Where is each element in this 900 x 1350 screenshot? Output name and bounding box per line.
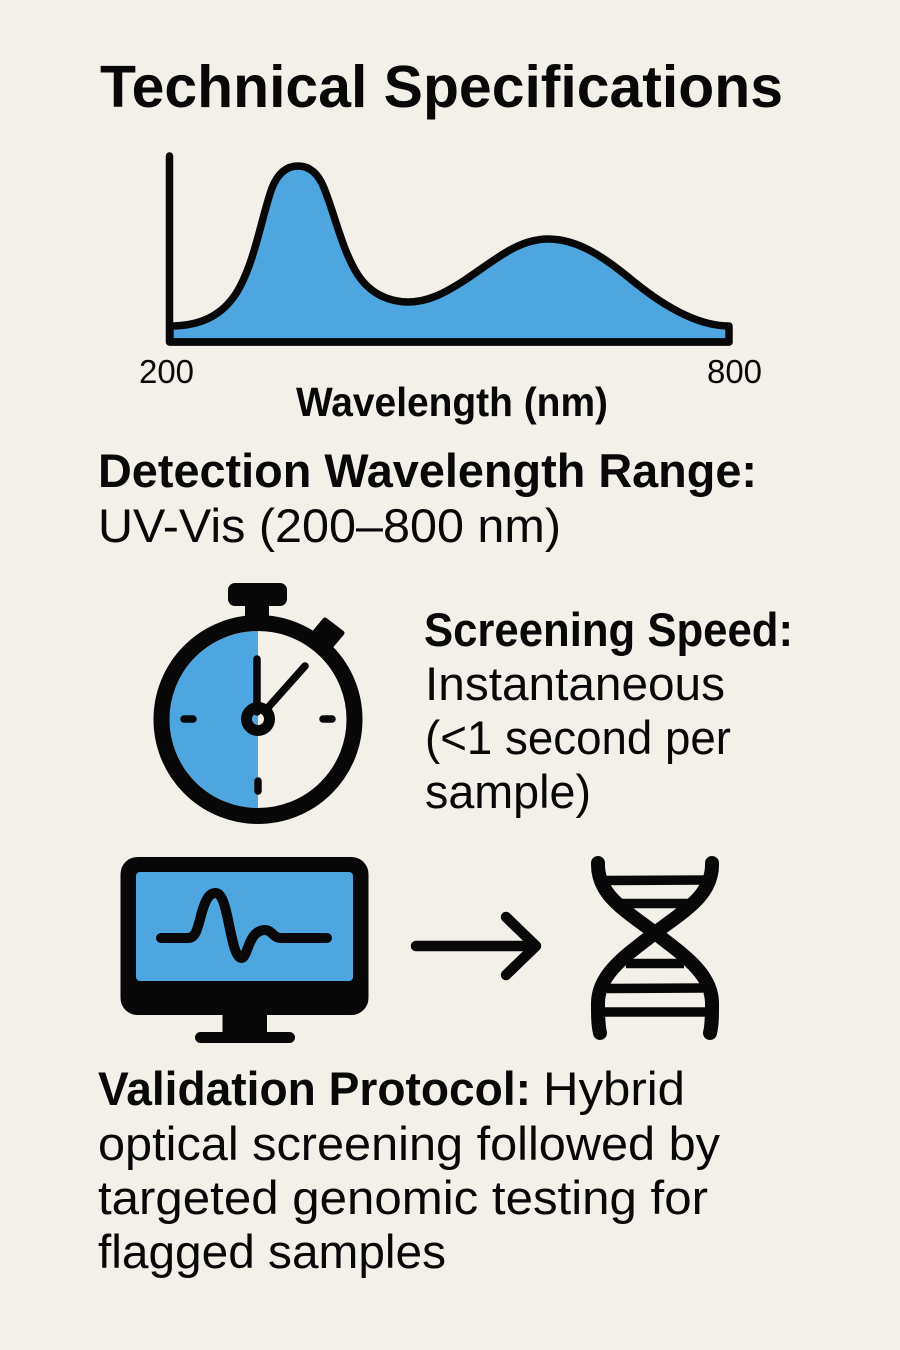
DNA rungs	[600, 880, 710, 1012]
DNA strands	[598, 863, 712, 1033]
heading: screening speed: Screening Speed:	[424, 603, 793, 656]
value: instantaneous: Instantaneous	[425, 657, 725, 710]
monitor base	[195, 1032, 295, 1043]
axis label: 200: 200	[139, 353, 194, 390]
icon: stopwatch	[162, 583, 354, 816]
monitor stand	[222, 1012, 267, 1036]
stopwatch side button	[315, 620, 342, 646]
text: line four: flagged samples	[98, 1225, 446, 1278]
stopwatch hands	[257, 659, 305, 712]
text: hybrid: Hybrid	[543, 1062, 685, 1115]
monitor screen	[136, 872, 353, 981]
arrow: monitor to DNA	[416, 917, 536, 975]
axis label: 800: 800	[707, 353, 762, 390]
chart axes	[170, 156, 729, 342]
monitor body	[120, 857, 368, 1015]
value: UV-Vis range: UV-Vis (200–800 nm)	[98, 499, 561, 552]
text block: detection wavelength range	[98, 444, 757, 552]
text block: validation protocol	[98, 1062, 721, 1278]
stopwatch crown	[228, 583, 287, 606]
heading: validation protocol: Validation Protocol:	[98, 1062, 531, 1115]
icon: DNA helix	[598, 863, 712, 1033]
stopwatch ring	[162, 623, 354, 816]
text block: screening speed	[424, 603, 793, 818]
chart: absorption spectrum curve	[170, 166, 729, 342]
stopwatch hub	[246, 708, 270, 730]
value: per second: (<1 second per	[425, 711, 731, 764]
stopwatch ticks	[184, 719, 332, 791]
value: sample: sample)	[425, 765, 591, 818]
icon: monitor with signal	[120, 857, 368, 1043]
monitor signal trace	[161, 893, 327, 958]
heading: detection wavelength range: Detection Wavelength Range:	[98, 444, 757, 497]
axis title: Wavelength (nm)	[296, 379, 608, 425]
stopwatch blue half dial	[170, 631, 258, 808]
panel: wavelength chart	[139, 156, 762, 425]
text: line two: optical screening followed by	[98, 1117, 721, 1170]
stopwatch neck	[245, 604, 269, 624]
title: Technical Specifications	[100, 54, 783, 120]
text: line three: targeted genomic testing for	[98, 1171, 708, 1224]
